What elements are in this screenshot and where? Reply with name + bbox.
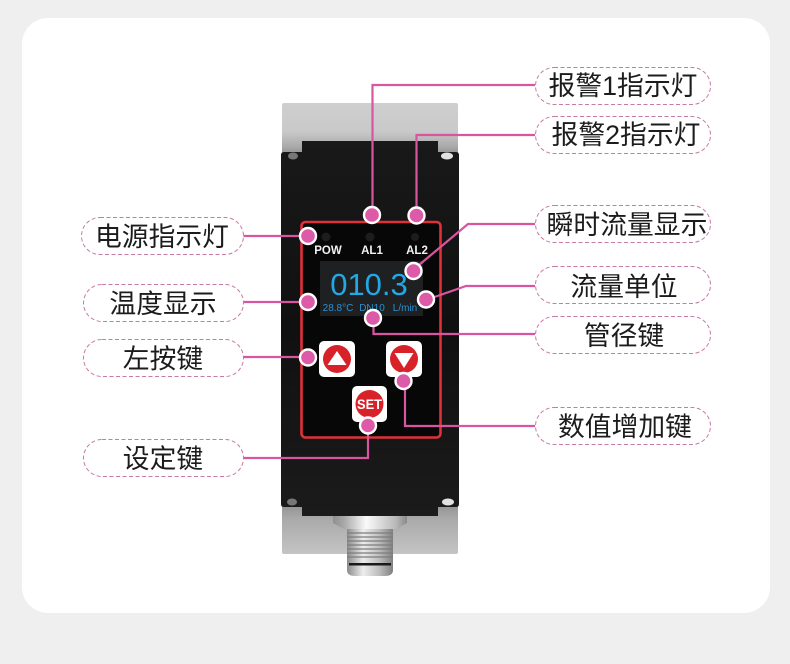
LED labels: AL1 [361, 245, 383, 257]
LED labels: AL2 [406, 245, 428, 257]
label: 报警2指示灯 [536, 116, 710, 154]
LCD display: 010.3 [330, 267, 408, 302]
sensor device [281, 103, 459, 576]
LCD display: DN10 [359, 303, 385, 314]
label: 管径键 [536, 316, 710, 354]
label: 报警2指示灯: 报警2指示灯 [552, 120, 700, 150]
label: 左按键: 左按键 [123, 344, 203, 374]
SET button: SET [357, 396, 382, 412]
LCD display: 28.8°C [323, 303, 353, 314]
label: 流量单位 [536, 266, 710, 304]
connector collar [333, 514, 407, 529]
up button [319, 341, 355, 377]
LCD display [320, 261, 423, 316]
label: 左按键 [84, 340, 244, 376]
indicator LEDs [322, 232, 419, 242]
top aluminium block [282, 103, 458, 155]
label: 管径键: 管径键 [584, 321, 664, 351]
LED labels [314, 245, 428, 257]
callout dots [300, 207, 434, 434]
label: 流量单位: 流量单位 [570, 272, 678, 302]
label: 报警1指示灯 [536, 68, 710, 104]
label: 电源指示灯: 电源指示灯 [95, 222, 229, 252]
label: 瞬时流量显示: 瞬时流量显示 [547, 210, 707, 240]
black housing [281, 141, 459, 516]
label: 电源指示灯 [82, 218, 244, 254]
label: 温度显示: 温度显示 [109, 289, 217, 319]
corner screws [287, 152, 454, 506]
label: 数值增加键: 数值增加键 [558, 412, 692, 442]
down button [386, 341, 422, 377]
LCD display: L/min [393, 303, 417, 314]
label: 温度显示 [84, 284, 244, 322]
red control frame [302, 222, 440, 438]
bottom aluminium block [282, 503, 458, 554]
label: 设定键: 设定键 [123, 444, 203, 474]
SET button [352, 386, 387, 422]
threaded connector [347, 529, 393, 576]
LED labels: POW [314, 245, 342, 257]
label: 报警1指示灯: 报警1指示灯 [549, 71, 697, 101]
leader lines [243, 85, 535, 458]
label: 数值增加键 [536, 408, 710, 444]
label: 设定键 [84, 440, 244, 476]
